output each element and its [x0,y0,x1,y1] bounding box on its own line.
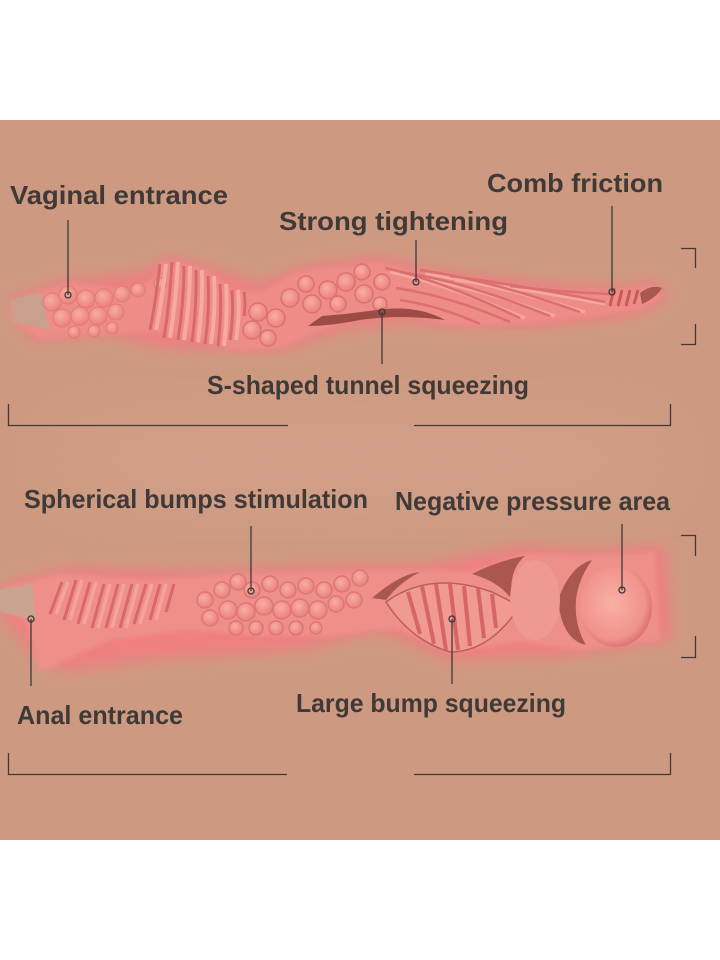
texture: entrance bumps [10,278,166,338]
diagram: upper channel [8,256,668,350]
texture: ribs [156,262,239,346]
leader line: S-shaped tunnel squeezing [379,309,385,364]
label: Strong tightening: Strong tightening [279,206,508,236]
texture: large bump [386,583,520,652]
leader line: Spherical bumps stimulation [248,526,254,594]
leader line: Vaginal entrance [65,220,71,298]
texture: middle bumps [243,264,390,346]
leader line: Negative pressure area [619,524,625,593]
upper width bracket [8,404,670,426]
leader line: Large bump squeezing [449,616,455,684]
texture: comb end [610,288,638,306]
lower width bracket [8,753,670,774]
leader line: Anal entrance [28,616,34,686]
label: Large bump squeezing: Large bump squeezing [296,688,566,718]
label: Vaginal entrance: Vaginal entrance [10,180,228,210]
texture: dark cavity [372,556,592,645]
upper height bracket [681,248,696,344]
panel: skin-tone background [0,120,720,840]
leader line: Strong tightening [413,240,419,285]
label: Anal entrance: Anal entrance [17,700,183,730]
texture: negative pressure ball [584,572,652,647]
label: Negative pressure area: Negative pressure area [395,486,671,516]
texture: dark fold [308,308,445,326]
texture: twisted strands [390,272,605,318]
texture: spherical bumps [197,570,368,635]
label: Spherical bumps stimulation: Spherical bumps stimulation [24,484,368,514]
leader line: Comb friction [609,206,615,295]
label: S-shaped tunnel squeezing: S-shaped tunnel squeezing [207,370,529,400]
texture: lower ribs [56,580,166,628]
label: Comb friction: Comb friction [487,168,663,198]
diagram: lower channel [0,545,672,672]
lower height bracket [681,536,696,658]
